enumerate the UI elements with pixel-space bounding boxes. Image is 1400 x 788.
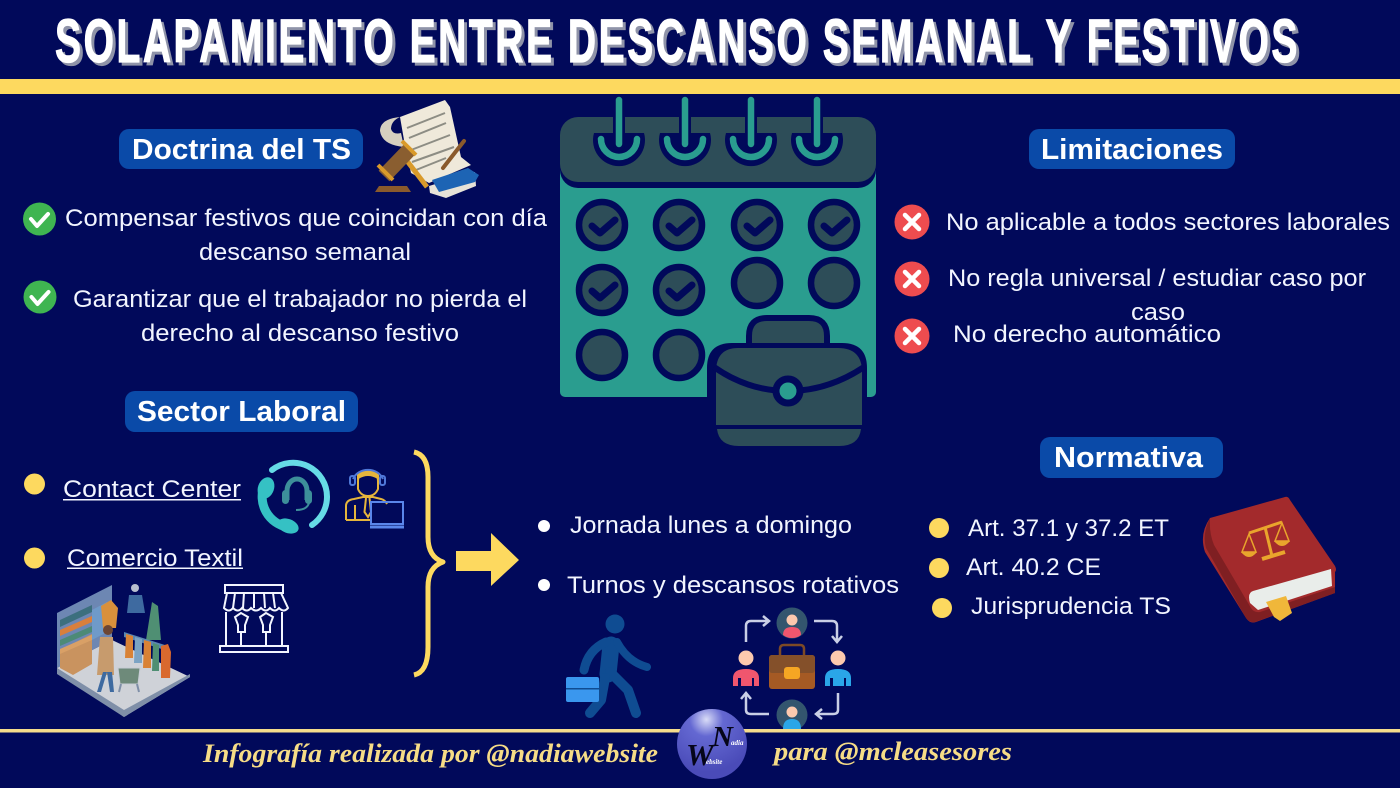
bullet: art 40 [929, 558, 949, 578]
text: compensar festivos: Compensar festivos que coincidan con día [65, 205, 548, 232]
calendar check marks [592, 220, 847, 298]
icon: walking worker with case [566, 614, 647, 713]
panel: characteristics [538, 512, 899, 730]
icon: headset and phone [255, 463, 327, 536]
heading: Normativa: Normativa [1054, 442, 1204, 474]
text: no derecho automatico: No derecho automático [953, 321, 1221, 348]
heading: Doctrina del TS [119, 129, 363, 169]
text: no regla universal: No regla universal / estudiar caso por [948, 265, 1366, 292]
text: compensar festivos [65, 205, 548, 266]
footer credit left: Infografía realizada por @nadiawebsite [202, 739, 658, 768]
top yellow band [0, 79, 1400, 94]
brace [414, 452, 443, 675]
panel: Sector Laboral [24, 391, 404, 717]
icon: call center agent [346, 470, 404, 527]
bullet: jurisprudencia [932, 598, 952, 618]
icon: calendar with briefcase [560, 100, 876, 447]
heading: Limitaciones [1029, 129, 1235, 169]
panel: Normativa [929, 437, 1336, 622]
text: jornada: Jornada lunes a domingo [570, 512, 852, 539]
x icon 1 [894, 204, 930, 240]
icon: clothing store illustration [57, 584, 190, 717]
text: art 40: Art. 40.2 CE [966, 554, 1101, 581]
text: garantizar: Garantizar que el trabajador no pierda el [73, 286, 527, 313]
icon: law book [1203, 497, 1336, 622]
panel: Limitaciones [894, 129, 1390, 354]
check icon 1 [23, 202, 56, 236]
calendar day circles [579, 202, 857, 378]
bullet: comercio textil [24, 548, 45, 568]
logo: Nadia Website: ebsite [706, 758, 722, 766]
arrow [456, 533, 519, 586]
text: comercio textil: Comercio Textil [67, 545, 243, 572]
text: garantizar: derecho al descanso festivo [141, 320, 459, 347]
bullet: jornada [538, 520, 550, 532]
footer credit right: para @mcleasesores [772, 737, 1012, 766]
bullet: art 37 [929, 518, 949, 538]
logo: Nadia Website: adia [731, 739, 744, 747]
heading: Normativa [1040, 437, 1223, 478]
logo: Nadia Website: N [711, 721, 734, 753]
footer line [0, 729, 1400, 732]
logo: Nadia Website [677, 709, 747, 779]
bullet: turnos [538, 579, 550, 591]
text: garantizar [73, 286, 527, 347]
heading: Doctrina del TS: Doctrina del TS [132, 134, 351, 166]
x icon 2 [894, 262, 930, 296]
check icon 2 [24, 280, 56, 314]
text: compensar festivos: descanso semanal [199, 239, 411, 266]
icon: rotating team around briefcase [733, 608, 851, 730]
briefcase [707, 318, 867, 447]
text: turnos: Turnos y descansos rotativos [567, 572, 899, 599]
text: no regla universal [948, 265, 1366, 326]
text: art 37: Art. 37.1 y 37.2 ET [968, 515, 1169, 542]
icon: gavel, scroll and books [375, 100, 479, 198]
text: jurisprudencia: Jurisprudencia TS [971, 593, 1171, 620]
text: contact center: Contact Center [63, 476, 241, 503]
text: no regla universal: caso [1131, 299, 1185, 326]
bullet: contact center [24, 474, 45, 494]
x icon 3 [894, 318, 930, 354]
heading: Sector Laboral: Sector Laboral [137, 396, 346, 428]
panel: Doctrina del TS [23, 100, 548, 347]
heading: Sector Laboral [125, 391, 358, 432]
icon: storefront outline [220, 585, 288, 652]
text: no aplicable: No aplicable a todos sectores laborales [946, 209, 1390, 236]
calendar rings [593, 100, 843, 166]
heading: Limitaciones: Limitaciones [1041, 134, 1223, 166]
logo: Nadia Website: W [686, 737, 716, 772]
